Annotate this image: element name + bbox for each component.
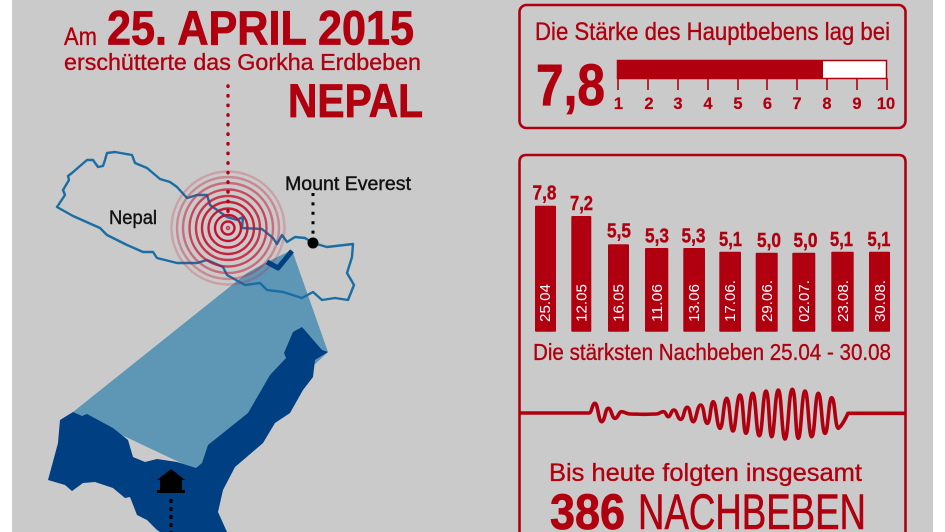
bar chart: strongest aftershocks: 7,8 (532, 182, 556, 204)
panel heading: Die Stärke des Hauptbebens lag bei (535, 18, 890, 46)
red dotted leader line (226, 86, 230, 212)
magnitude scale bar: 10 (877, 95, 895, 113)
bar chart: strongest aftershocks: 5,0 (757, 230, 781, 252)
callout: aftershock total (549, 459, 866, 532)
bar chart: strongest aftershocks: 11.06 (649, 284, 666, 322)
title: date and Nepal heading: Am (64, 23, 97, 51)
marker: Mount Everest (308, 193, 318, 248)
label: Mount Everest: Mount Everest (285, 174, 412, 195)
magnitude scale bar: 2 (644, 95, 654, 113)
magnitude scale bar: 7 (792, 95, 802, 113)
magnitude scale bar: 3 (673, 95, 683, 113)
panel: aftershocks (520, 155, 906, 532)
bar chart: strongest aftershocks: 30.08. (872, 280, 889, 322)
magnitude scale bar: 6 (763, 95, 772, 113)
icon: small affected region in map (267, 251, 292, 268)
magnitude scale bar: 5 (733, 95, 743, 113)
title: date and Nepal heading: NEPAL (288, 74, 423, 127)
bar chart: strongest aftershocks: 5,1 (830, 229, 853, 251)
bar chart: strongest aftershocks (532, 182, 890, 332)
title: date and Nepal heading (64, 2, 423, 127)
title: date and Nepal heading: erschütterte das Gorkha Erdbeben (64, 49, 421, 75)
icon: house (157, 469, 185, 493)
bar chart: strongest aftershocks: 5,0 (794, 230, 818, 252)
bar chart: strongest aftershocks: 23.08. (835, 280, 852, 322)
panel: main quake magnitude (520, 5, 906, 128)
map: enlarged dark blue region (48, 327, 328, 532)
bar chart: strongest aftershocks: 5,1 (868, 229, 890, 251)
magnitude scale bar: 9 (852, 95, 862, 113)
bar chart: strongest aftershocks: 13.06 (686, 284, 703, 322)
bar chart: strongest aftershocks: 5,3 (645, 226, 669, 248)
bar chart: strongest aftershocks: 5,3 (682, 226, 706, 248)
light blue zoom fan (73, 250, 328, 472)
map: Nepal outline (57, 152, 354, 300)
bar chart: strongest aftershocks: 7,2 (570, 193, 593, 215)
magnitude scale bar: 4 (703, 95, 713, 113)
icon: epicentre rings (172, 172, 284, 284)
bar chart: strongest aftershocks: 12.05 (574, 284, 590, 322)
bar chart: strongest aftershocks: 5,5 (607, 221, 631, 243)
callout: aftershock total: Bis heute folgten insgesamt (549, 459, 862, 487)
magnitude scale bar: 8 (822, 95, 832, 113)
black dotted house leader (170, 499, 172, 532)
magnitude number: 7,8 (536, 53, 605, 118)
bar chart: strongest aftershocks: 29.06. (759, 280, 776, 322)
bar chart: strongest aftershocks: 25.04 (537, 284, 554, 322)
seismograph wave (520, 389, 905, 439)
bar chart: strongest aftershocks: 02.07. (796, 280, 813, 322)
bar chart: strongest aftershocks: 5,1 (719, 229, 742, 251)
magnitude scale bar: 1 (614, 95, 623, 113)
bar chart: strongest aftershocks: 17.06. (722, 280, 739, 322)
chart caption: Die stärksten Nachbeben 25.04 - 30.08 (533, 339, 891, 365)
label: Nepal: Nepal (109, 208, 157, 229)
magnitude scale bar (614, 60, 895, 113)
bar chart: strongest aftershocks: 16.05 (610, 284, 628, 322)
title: date and Nepal heading: 25. APRIL 2015 (107, 2, 414, 56)
